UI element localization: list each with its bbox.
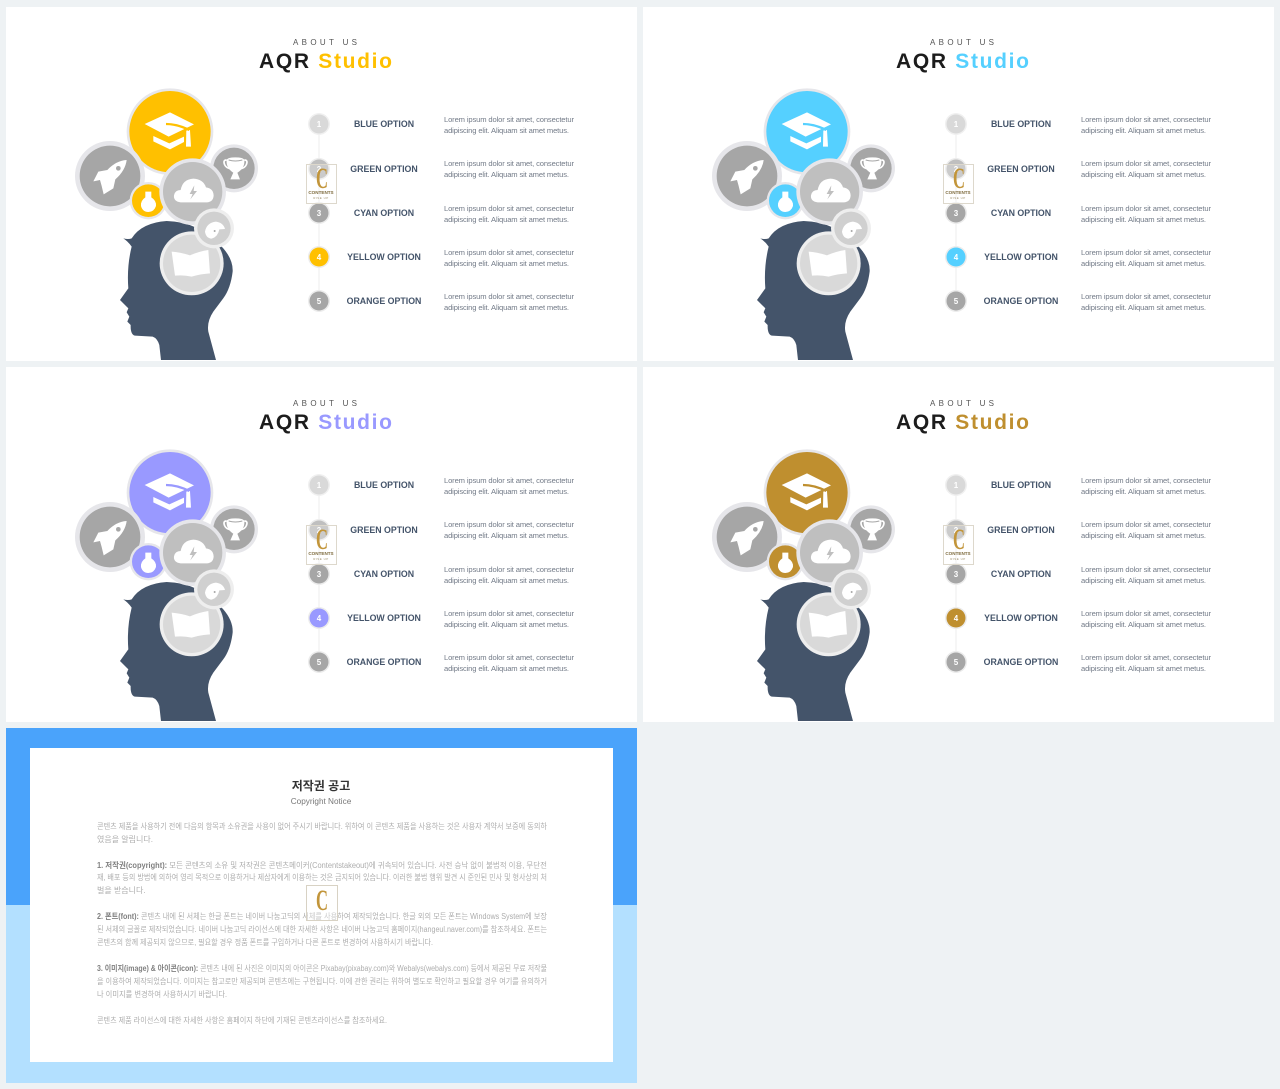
panel: gold slide — [643, 367, 1274, 722]
text block: image and icon: 을 이용하여 제작되었습니다. 이미지는 참고로만 제공되며 콘텐츠에는 구현됩니다. 이에 관한 권리는 위하여 별도로 확인하고 필요할 경우 여기를 유의하거 — [97, 976, 547, 986]
watermark logo: CONTENTS — [308, 551, 334, 556]
text block: copyright: 1. 저작권(copyright): 모든 콘텐츠의 소유 및 저작권은 콘텐츠메이커(Contentstakeout)에 귀속되어 있습니다. 사전 승낙 없이 불법적 이용, 무단전 — [97, 860, 547, 870]
option row 3: adipiscing elit. Aliquam sit amet metus. — [1081, 576, 1206, 585]
option row 5 — [945, 290, 1211, 312]
bubble: book — [160, 231, 224, 295]
option row 3: Lorem ipsum dolor sit amet, consectetur — [444, 565, 574, 574]
option row 5: adipiscing elit. Aliquam sit amet metus. — [444, 664, 569, 673]
watermark logo — [944, 523, 974, 564]
bubble: graduation cap — [127, 88, 213, 175]
bubble: flask — [130, 543, 167, 580]
option row 1 — [945, 474, 1211, 496]
bubble: graduation cap — [764, 88, 850, 175]
option row 3 — [945, 202, 1211, 224]
illustration: head with idea bubbles — [712, 88, 895, 360]
option row 3: 3 — [317, 570, 322, 579]
option row 5: Lorem ipsum dolor sit amet, consectetur — [444, 292, 574, 301]
bubble: book — [797, 592, 861, 656]
watermark logo — [306, 162, 336, 204]
bubble: flask — [130, 182, 167, 219]
text block: copyright — [97, 860, 547, 895]
bubble: small — [831, 569, 871, 609]
option row 1: 1 — [954, 120, 959, 129]
option row 5: ORANGE OPTION — [984, 657, 1058, 667]
watermark logo — [306, 523, 336, 564]
option row 4: YELLOW OPTION — [347, 252, 421, 262]
option row 2 — [945, 158, 1211, 180]
watermark logo: C — [953, 523, 965, 556]
text block: image and icon: 3. 이미지(image) & 아이콘(icon): 콘텐츠 내에 된 사진은 이미지의 아이콘은 Pixabay(pixabay.com)와 Webalys(webalys.com) 등에서 제공된 무료 저작물 — [97, 963, 547, 973]
option row 2: adipiscing elit. Aliquam sit amet metus. — [1081, 531, 1206, 540]
panel: copyright notice — [6, 728, 637, 1083]
text block: font — [97, 911, 548, 947]
option row 1: adipiscing elit. Aliquam sit amet metus. — [444, 487, 569, 496]
watermark logo: C — [953, 162, 965, 195]
option row 2 — [308, 158, 574, 180]
option row 1: adipiscing elit. Aliquam sit amet metus. — [1081, 487, 1206, 496]
option row 4: 4 — [317, 253, 322, 262]
head silhouette — [757, 221, 870, 360]
option row 3: Lorem ipsum dolor sit amet, consectetur — [444, 204, 574, 213]
watermark logo: RISE UP — [313, 557, 329, 561]
bubble: graduation cap — [764, 449, 850, 536]
bubble: small — [194, 569, 234, 609]
option row 2: Lorem ipsum dolor sit amet, consectetur — [1081, 520, 1211, 529]
option row 4: Lorem ipsum dolor sit amet, consectetur — [1081, 248, 1211, 257]
option row 3 — [308, 202, 574, 224]
text block: intro: 였음을 알립니다. — [97, 834, 153, 844]
bubble: trophy — [210, 505, 258, 553]
watermark logo: CONTENTS — [308, 190, 334, 195]
option row 5: Lorem ipsum dolor sit amet, consectetur — [1081, 653, 1211, 662]
text block: license note: 콘텐츠 제품 라이선스에 대한 자세한 사항은 홈페이지 하단에 기재된 콘텐츠라이선스를 참조하세요. — [97, 1015, 387, 1025]
bubble: cloud — [159, 519, 226, 586]
bubble: rocket — [75, 502, 145, 572]
option row 4: YELLOW OPTION — [347, 613, 421, 623]
option row 5 — [308, 651, 574, 673]
option row 2: 2 — [317, 526, 322, 535]
option row 5: adipiscing elit. Aliquam sit amet metus. — [1081, 664, 1206, 673]
option row 1: BLUE OPTION — [354, 119, 414, 129]
bubble: trophy — [847, 144, 895, 192]
option row 2: 2 — [954, 165, 959, 174]
option row 4: adipiscing elit. Aliquam sit amet metus. — [1081, 620, 1206, 629]
option row 5: ORANGE OPTION — [347, 657, 421, 667]
option row 2: GREEN OPTION — [987, 525, 1055, 535]
bubble: trophy — [847, 505, 895, 553]
option row 2 — [945, 519, 1211, 541]
illustration: head with idea bubbles — [75, 449, 258, 721]
text block: image and icon: 나 이미지를 변경하여 사용하시기 바랍니다. — [97, 989, 227, 999]
illustration: head with idea bubbles — [75, 88, 258, 360]
option row 4: adipiscing elit. Aliquam sit amet metus. — [444, 620, 569, 629]
option row 1: Lorem ipsum dolor sit amet, consectetur — [1081, 476, 1211, 485]
heading: about us: ABOUT US — [930, 399, 994, 408]
option row 4 — [945, 607, 1211, 629]
option row 1: 1 — [317, 481, 322, 490]
heading: AQR Studio: AQR Studio — [259, 50, 392, 73]
option row 2: GREEN OPTION — [987, 164, 1055, 174]
option row 4: 4 — [317, 614, 322, 623]
text block: font: 2. 폰트(font): 콘텐츠 내에 된 서체는 한글 폰트는 네이버 나눔고딕의 서체를 사용하여 제작되었습니다. 한글 외의 모든 폰트는 Windows System에 보장 — [97, 911, 548, 921]
heading: AQR Studio: AQR Studio — [896, 50, 1029, 73]
option row 4 — [308, 246, 574, 268]
option row 3: Lorem ipsum dolor sit amet, consectetur — [1081, 204, 1211, 213]
watermark logo: C — [316, 884, 328, 917]
heading: copyright notice Korean: 저작권 공고 — [292, 778, 350, 793]
option row 5: 5 — [317, 297, 322, 306]
option row 1: adipiscing elit. Aliquam sit amet metus. — [444, 126, 569, 135]
option row 3: 3 — [954, 209, 959, 218]
option row 4 — [308, 607, 574, 629]
watermark logo: RISE UP — [950, 196, 966, 200]
option row 1 — [308, 113, 574, 135]
watermark logo — [306, 884, 338, 920]
bubble: cloud — [796, 519, 863, 586]
option row 1: BLUE OPTION — [354, 480, 414, 490]
option row 2 — [308, 519, 574, 541]
option row 1: BLUE OPTION — [991, 480, 1051, 490]
option row 1: 1 — [317, 120, 322, 129]
option row 3: CYAN OPTION — [354, 208, 414, 218]
bubble: rocket — [712, 141, 782, 211]
bubble: flask — [767, 182, 804, 219]
text block: intro — [97, 821, 548, 844]
option row 5: 5 — [954, 658, 959, 667]
option row 4: Lorem ipsum dolor sit amet, consectetur — [1081, 609, 1211, 618]
panel: cyan slide — [643, 7, 1274, 361]
watermark logo: C — [316, 162, 328, 195]
option row 1: Lorem ipsum dolor sit amet, consectetur — [444, 115, 574, 124]
watermark logo: C — [316, 523, 328, 556]
timeline line — [955, 124, 957, 301]
heading: copyright notice English: Copyright Notice — [291, 797, 352, 806]
option row 2: adipiscing elit. Aliquam sit amet metus. — [444, 170, 569, 179]
head silhouette — [120, 221, 233, 360]
option row 3: adipiscing elit. Aliquam sit amet metus. — [1081, 215, 1206, 224]
option row 5: adipiscing elit. Aliquam sit amet metus. — [444, 303, 569, 312]
watermark logo: CONTENTS — [945, 190, 971, 195]
option row 5: ORANGE OPTION — [347, 296, 421, 306]
option row 4: YELLOW OPTION — [984, 252, 1058, 262]
bubble: rocket — [75, 141, 145, 211]
option row 2: adipiscing elit. Aliquam sit amet metus. — [444, 531, 569, 540]
option row 5: Lorem ipsum dolor sit amet, consectetur — [1081, 292, 1211, 301]
heading: AQR Studio: AQR Studio — [259, 411, 392, 434]
option row 4: 4 — [954, 614, 959, 623]
option row 3: 3 — [317, 209, 322, 218]
bubble: small — [194, 208, 234, 248]
heading: about us: ABOUT US — [293, 38, 357, 47]
option row 3 — [945, 563, 1211, 585]
text block: image and icon — [97, 963, 547, 999]
text block: copyright: 재, 배포 등의 방법에 의하여 영리 목적으로 이용하거나 제삼자에게 이용하는 것은 금지되어 있습니다. 이러한 불법 행위 발견 시 준인된 민사 및 형사상의 처 — [97, 872, 547, 882]
bubble: cloud — [796, 158, 863, 225]
option row 4: Lorem ipsum dolor sit amet, consectetur — [444, 248, 574, 257]
option row 5 — [308, 290, 574, 312]
bubble: book — [160, 592, 224, 656]
text block: font: 된 서체의 글꼴로 제작되었습니다. 네이버 나눔고딕 라이선스에 대한 자세한 사항은 네이버 나눔고딕 홈페이지(hangeul.naver.com)를 참조하세요. 폰트는 — [97, 924, 547, 934]
option row 2: adipiscing elit. Aliquam sit amet metus. — [1081, 170, 1206, 179]
option row 1: Lorem ipsum dolor sit amet, consectetur — [444, 476, 574, 485]
option row 5: 5 — [954, 297, 959, 306]
text block: copyright: 벌을 받습니다. — [97, 885, 146, 895]
option row 3: adipiscing elit. Aliquam sit amet metus. — [444, 576, 569, 585]
heading: about us: ABOUT US — [293, 399, 357, 408]
option row 4: adipiscing elit. Aliquam sit amet metus. — [1081, 259, 1206, 268]
option row 2: GREEN OPTION — [350, 164, 418, 174]
illustration: head with idea bubbles — [712, 449, 895, 721]
option row 2: GREEN OPTION — [350, 525, 418, 535]
bubble: graduation cap — [127, 449, 213, 536]
option row 3: adipiscing elit. Aliquam sit amet metus. — [444, 215, 569, 224]
option row 5: ORANGE OPTION — [984, 296, 1058, 306]
timeline line — [318, 124, 320, 301]
option row 5: Lorem ipsum dolor sit amet, consectetur — [444, 653, 574, 662]
bubble: small — [831, 208, 871, 248]
option row 1: BLUE OPTION — [991, 119, 1051, 129]
option row 4 — [945, 246, 1211, 268]
option row 2: Lorem ipsum dolor sit amet, consectetur — [1081, 159, 1211, 168]
option row 2: Lorem ipsum dolor sit amet, consectetur — [444, 159, 574, 168]
watermark logo: RISE UP — [950, 557, 966, 561]
option row 4: YELLOW OPTION — [984, 613, 1058, 623]
bubble: cloud — [159, 158, 226, 225]
panel: yellow slide — [6, 7, 637, 361]
heading: AQR Studio: AQR Studio — [896, 411, 1029, 434]
option row 1 — [308, 474, 574, 496]
watermark logo: CONTENTS — [945, 551, 971, 556]
panel: purple slide — [6, 367, 637, 722]
option row 1: adipiscing elit. Aliquam sit amet metus. — [1081, 126, 1206, 135]
option row 4: Lorem ipsum dolor sit amet, consectetur — [444, 609, 574, 618]
option row 4: adipiscing elit. Aliquam sit amet metus. — [444, 259, 569, 268]
bubble: book — [797, 231, 861, 295]
option row 3: CYAN OPTION — [991, 569, 1051, 579]
option row 2: 2 — [954, 526, 959, 535]
option row 2: 2 — [317, 165, 322, 174]
text block: intro: 콘텐츠 제품을 사용하기 전에 다음의 항목과 소유권을 사용이 없어 주시기 바랍니다. 위하여 이 콘텐츠 제품을 사용하는 것은 사용자 계약서 보증에 동의하 — [97, 821, 548, 831]
option row 3: 3 — [954, 570, 959, 579]
option row 1: 1 — [954, 481, 959, 490]
text block: font: 콘텐츠의 함께 제공되지 않으므로, 필요할 경우 정품 폰트를 구입하거나 다른 폰트로 변경하여 사용하시기 바랍니다. — [97, 937, 433, 947]
option row 4: 4 — [954, 253, 959, 262]
option row 5: 5 — [317, 658, 322, 667]
bubble: flask — [767, 543, 804, 580]
option row 3: CYAN OPTION — [991, 208, 1051, 218]
head silhouette — [120, 582, 233, 721]
heading: about us: ABOUT US — [930, 38, 994, 47]
option row 3 — [308, 563, 574, 585]
option row 5: adipiscing elit. Aliquam sit amet metus. — [1081, 303, 1206, 312]
option row 2: Lorem ipsum dolor sit amet, consectetur — [444, 520, 574, 529]
watermark logo: RISE UP — [313, 196, 329, 200]
head silhouette — [757, 582, 870, 721]
option row 1: Lorem ipsum dolor sit amet, consectetur — [1081, 115, 1211, 124]
timeline line — [318, 485, 320, 662]
watermark logo — [944, 162, 974, 204]
option row 3: CYAN OPTION — [354, 569, 414, 579]
bubble: trophy — [210, 144, 258, 192]
option row 1 — [945, 113, 1211, 135]
option row 3: Lorem ipsum dolor sit amet, consectetur — [1081, 565, 1211, 574]
timeline line — [955, 485, 957, 662]
option row 5 — [945, 651, 1211, 673]
bubble: rocket — [712, 502, 782, 572]
